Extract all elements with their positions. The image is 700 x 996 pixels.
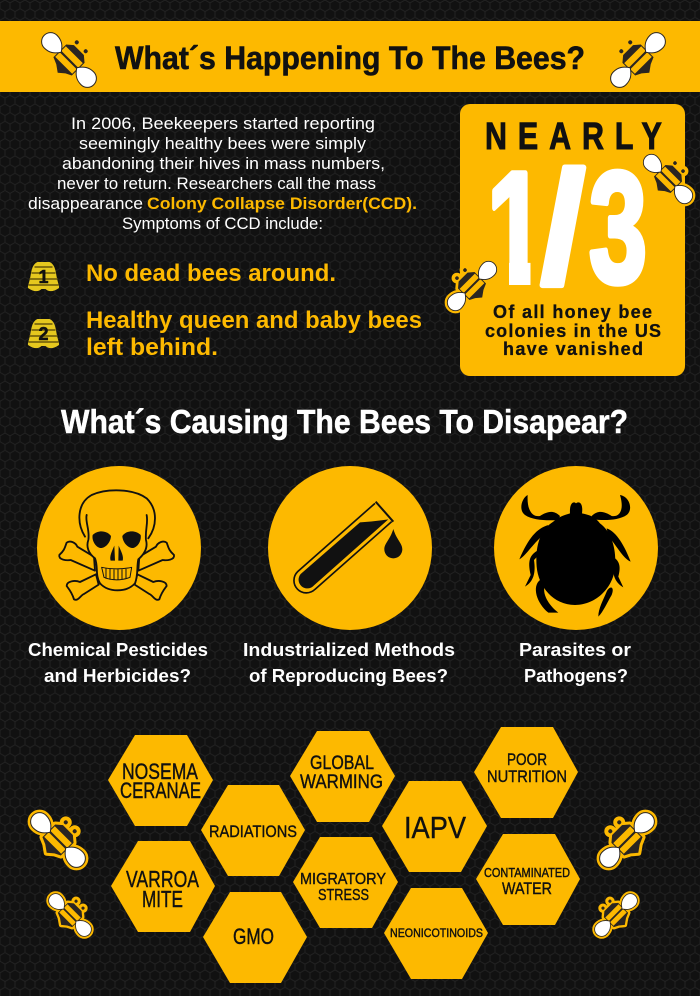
hexagon: nosema ceranae: CERANAE xyxy=(120,778,201,803)
caption: chemical pesticides: Chemical Pesticides xyxy=(28,640,208,660)
hexagon: poor nutrition: POOR xyxy=(507,750,547,769)
icon: tick parasite xyxy=(519,495,631,617)
panel: parasites or pathogens xyxy=(494,466,658,686)
icon: skull and crossbones xyxy=(59,490,174,600)
hexagon: iapv: IAPV xyxy=(404,810,466,845)
intro text block: seemingly healthy bees were simply xyxy=(79,135,367,153)
symptom text 2: left behind. xyxy=(86,334,218,361)
caption: industrialized methods xyxy=(243,640,455,686)
hexagon: global warming: GLOBAL xyxy=(310,753,374,774)
hexagon: nosema ceranae xyxy=(108,735,213,826)
icon: bee bottom left large xyxy=(21,800,98,877)
hexagon: contaminated water: CONTAMINATED xyxy=(484,865,570,880)
icon: test tube with drop xyxy=(294,502,402,593)
caption: industrialized methods: of Reproducing Bees? xyxy=(249,666,448,686)
big number: 3 xyxy=(589,140,647,316)
hexagon: neonicotinoids: NEONICOTINOIDS xyxy=(390,926,483,940)
card caption: have vanished xyxy=(503,339,643,359)
icon: numbered hive 2 xyxy=(28,319,59,348)
hexagon: migratory stress xyxy=(293,837,398,928)
symptom text 2 xyxy=(86,307,422,361)
caption: industrialized methods: Industrialized Methods xyxy=(243,640,455,660)
hexagon: poor nutrition xyxy=(474,727,578,818)
icon: numbered hive 1 xyxy=(28,262,59,291)
icon: bee left xyxy=(32,21,108,97)
hexagon: gmo: GMO xyxy=(233,924,274,949)
intro text block: abandoning their hives in mass numbers, xyxy=(62,155,385,173)
hexagon: varroa mite xyxy=(111,841,215,932)
intro text block: Colony Collapse Disorder(CCD). xyxy=(147,195,417,213)
hexagon: migratory stress: MIGRATORY xyxy=(300,871,386,888)
symptom 1 xyxy=(28,260,336,291)
hexagon: gmo xyxy=(203,892,307,983)
intro text block xyxy=(28,115,417,233)
icon: bee bottom left small xyxy=(41,884,101,944)
nearly label: NEARLY xyxy=(485,116,662,158)
symptom 2 xyxy=(28,307,422,361)
hexagon: varroa mite: MITE xyxy=(142,886,183,912)
icon: bee lower left xyxy=(436,250,505,319)
card caption xyxy=(485,302,661,359)
hexagon: global warming xyxy=(290,731,395,822)
hexagon: poor nutrition: NUTRITION xyxy=(487,767,567,786)
hexagon: nosema ceranae: NOSEMA xyxy=(122,759,198,784)
intro text block: never to return. Researchers call the mass xyxy=(57,175,376,193)
hexagon: global warming: WARMING xyxy=(300,772,383,793)
caption: chemical pesticides xyxy=(28,640,208,686)
icon: bee bottom right large xyxy=(587,800,664,877)
hexagon: contaminated water: WATER xyxy=(502,879,552,898)
icon: numbered hive 2: 2 xyxy=(38,324,49,344)
hexagon: iapv xyxy=(382,781,487,872)
panel: nearly one third card xyxy=(436,104,700,376)
hexagon cluster xyxy=(108,727,580,983)
title: What´s Happening To The Bees? xyxy=(115,40,585,76)
card caption: Of all honey bee xyxy=(493,302,652,322)
icon: bee right xyxy=(599,21,675,97)
symptom text 1: No dead bees around. xyxy=(86,260,336,287)
intro text block: Symptoms of CCD include: xyxy=(122,215,323,233)
header banner xyxy=(0,21,700,97)
icon: numbered hive 1: 1 xyxy=(38,267,49,287)
hexagon: varroa mite: VARROA xyxy=(126,866,199,892)
panel: industrialized methods xyxy=(243,466,455,686)
card caption: colonies in the US xyxy=(485,321,661,341)
symptom text 2: Healthy queen and baby bees xyxy=(86,307,422,334)
intro text block: In 2006, Beekeepers started reporting xyxy=(71,115,375,133)
caption: parasites or pathogens: Pathogens? xyxy=(524,666,628,686)
caption: parasites or pathogens: Parasites or xyxy=(519,640,631,660)
panel: chemical pesticides xyxy=(28,466,208,686)
caption: chemical pesticides: and Herbicides? xyxy=(44,666,191,686)
causes heading: What´s Causing The Bees To Disapear? xyxy=(61,403,628,440)
hexagon: migratory stress: STRESS xyxy=(318,887,369,904)
icon: bee upper right xyxy=(635,143,700,212)
icon: bee bottom right small xyxy=(585,884,645,944)
hexagon: neonicotinoids xyxy=(384,888,488,979)
intro text block: disappearance xyxy=(28,195,143,213)
hexagon: contaminated water xyxy=(476,834,580,925)
hexagon: radiations: RADIATIONS xyxy=(209,822,297,841)
big number xyxy=(487,140,647,316)
big number: / xyxy=(541,140,585,316)
hexagon: radiations xyxy=(201,785,305,876)
big number: 1 xyxy=(487,140,545,316)
caption: parasites or pathogens xyxy=(519,640,631,686)
